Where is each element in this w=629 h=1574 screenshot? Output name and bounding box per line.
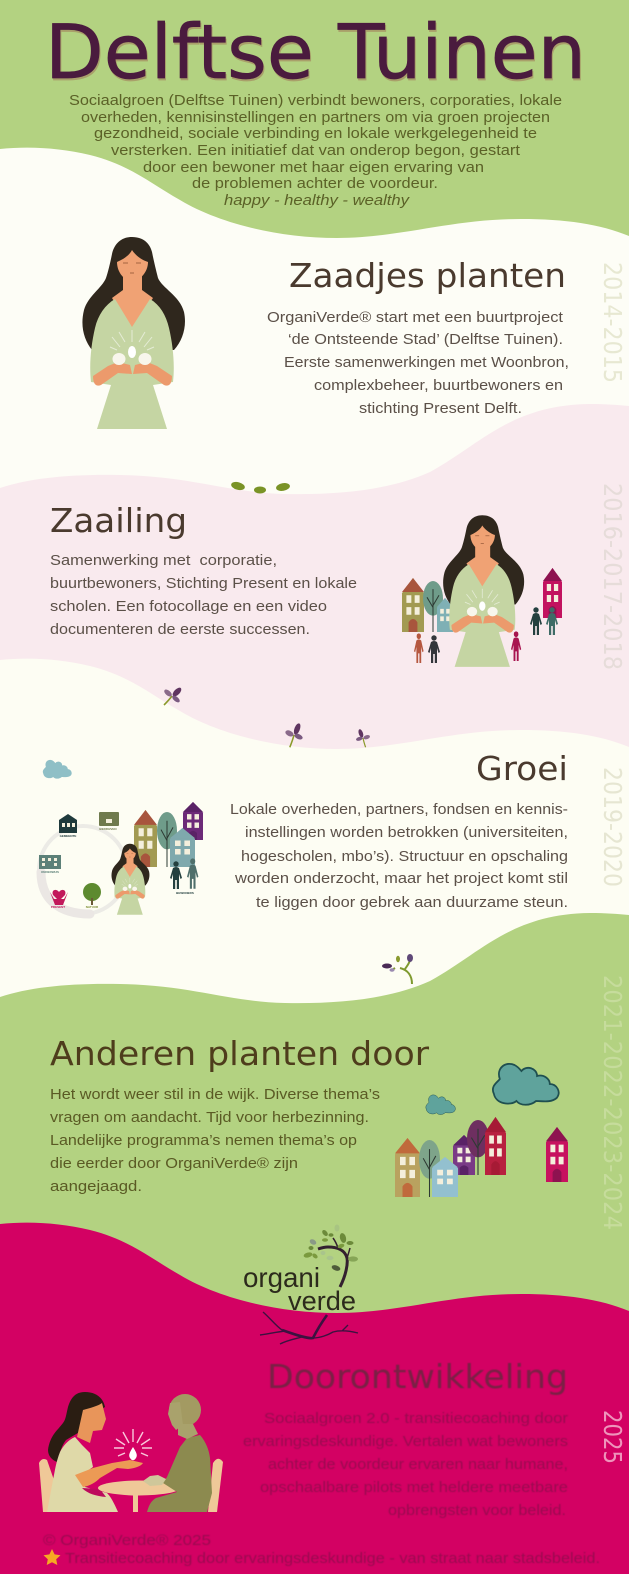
icon: sapling	[382, 954, 413, 984]
year label 2014-2015: 2014-2015	[598, 262, 627, 383]
heading: anderen planten door: Anderen planten door	[50, 1034, 429, 1073]
icon: star	[44, 1549, 60, 1565]
text: groei	[230, 802, 568, 911]
text: zaadjes planten: Eerste samenwerkingen met Woonbron,	[284, 355, 569, 371]
illustration: ecosystem ring with woman: NATUUR	[86, 905, 99, 909]
intro text: happy - healthy - wealthy	[224, 193, 411, 209]
year label 2016-2017-2018: 2016-2017-2018	[598, 483, 627, 670]
text: anderen planten door: Landelijke programma’s nemen thema’s op	[50, 1133, 357, 1149]
section: groei	[39, 749, 627, 915]
illustration: ecosystem ring with woman: PRESENT	[51, 905, 65, 909]
panel: zaadjes planten background	[0, 148, 629, 520]
section: anderen planten door	[50, 975, 627, 1230]
illustration: ecosystem ring with woman: ONDERWIJS	[41, 870, 59, 874]
illustration: ecosystem ring with woman: GEMEENTE	[60, 834, 76, 838]
text: doorontwikkeling: opschaalbare pilots met heldere meetbare	[260, 1480, 568, 1496]
illustration: two people at a table	[39, 1392, 223, 1512]
panel: zaailing background	[0, 404, 629, 760]
text: doorontwikkeling: ervaringsdeskundige. Vertalen wat bewoners	[243, 1434, 568, 1450]
year label 2021-2022-2023-2024: 2021-2022-2023-2024	[598, 975, 627, 1230]
text: groei: worden onderzocht, maar het project komt stil	[234, 871, 568, 887]
logo: organiverde: organi	[243, 1262, 320, 1293]
icon: sprout 2	[283, 721, 307, 748]
text: zaailing: scholen. Een fotocollage en een video	[50, 599, 327, 615]
text: anderen planten door: aangejaagd.	[50, 1179, 142, 1195]
text: zaailing: Samenwerking met corporatie,	[50, 553, 277, 569]
text: anderen planten door: vragen om aandacht. Tijd voor herbezinning.	[50, 1110, 369, 1126]
panel: groei background	[0, 659, 629, 1020]
text: groei: Lokale overheden, partners, fondsen en kennis-	[230, 802, 568, 818]
heading: zaadjes planten: Zaadjes planten	[289, 256, 566, 295]
heading: zaailing: Zaailing	[50, 501, 187, 540]
illustration: houses and trees	[395, 1117, 568, 1197]
illustration: woman holding seed	[82, 237, 185, 429]
intro text: door een bewoner met haar eigen ervaring van	[143, 160, 484, 176]
year label 2019-2020: 2019-2020	[598, 767, 627, 887]
title: Delftse Tuinen	[45, 8, 586, 96]
text: zaadjes planten: stichting Present Delft.	[359, 401, 522, 417]
text: zaailing	[50, 553, 357, 638]
text: doorontwikkeling: Sociaalgroen 2.0 - transitiecoaching door	[264, 1411, 568, 1427]
section: doorontwikkeling	[39, 1357, 627, 1567]
footer copyright: © OrganiVerde® 2025	[43, 1533, 211, 1549]
text: zaadjes planten	[267, 310, 569, 417]
intro text: gezondheid, sociale verbinding en lokale werkgelegenheid te	[94, 126, 537, 142]
text: anderen planten door: die eerder door OrganiVerde® zijn	[50, 1156, 298, 1172]
intro text: Sociaalgroen (Delftse Tuinen) verbindt bewoners, corporaties, lokale	[69, 93, 562, 109]
text: groei: te liggen door gebrek aan duurzame steun.	[256, 895, 568, 911]
logo: organiverde: verde	[288, 1286, 356, 1316]
intro text: versterken. Een initiatief dat van onderop begon, gestart	[111, 143, 520, 159]
illustration: woman with houses and people	[402, 515, 562, 667]
title: Delftse Tuinen	[46, 10, 587, 98]
text: zaailing: documenteren de eerste successen.	[50, 622, 310, 638]
icon: small cloud	[426, 1095, 455, 1115]
footer tagline: Transitiecoaching door ervaringsdeskundige - van straat naar stadsbeleid.	[65, 1551, 600, 1567]
logo: organiverde	[243, 1224, 358, 1344]
year label 2025: 2025	[598, 1410, 627, 1464]
intro text: de problemen achter de voordeur.	[192, 176, 438, 192]
text: zaadjes planten: ‘de Ontsteende Stad’ (Delftse Tuinen).	[288, 332, 563, 348]
icon: sprout 3	[353, 727, 372, 748]
text: anderen planten door: Het wordt weer stil in de wijk. Diverse thema’s	[50, 1087, 380, 1103]
panel: anderen planten door background	[0, 913, 629, 1330]
text: zaadjes planten: complexbeheer, buurtbewoners en	[314, 378, 563, 394]
icon: cloud small	[43, 760, 72, 779]
text: groei: hogescholen, mbo’s). Structuur en opschaling	[241, 849, 568, 865]
text: doorontwikkeling	[243, 1411, 568, 1519]
text: groei: instellingen worden betrokken (universiteiten,	[245, 825, 568, 841]
text: anderen planten door	[50, 1087, 380, 1195]
icon: large cloud	[493, 1064, 559, 1105]
illustration: ecosystem ring with woman: BEWONERS	[176, 891, 194, 895]
text: zaailing: buurtbewoners, Stichting Present en lokale	[50, 576, 357, 592]
heading: doorontwikkeling: Doorontwikkeling	[267, 1357, 568, 1396]
icon: sprout 1	[163, 686, 183, 705]
text: doorontwikkeling: achter de voordeur ervaren naar humane,	[268, 1457, 568, 1473]
heading: groei: Groei	[476, 749, 568, 788]
intro text: overheden, kennisinstellingen en partners om via groen projecten	[81, 110, 550, 126]
intro section	[45, 8, 587, 209]
panel: doorontwikkeling background	[0, 1223, 629, 1574]
illustration: ecosystem ring with woman	[39, 802, 203, 915]
intro text	[69, 93, 562, 209]
icon: seeds	[230, 481, 291, 494]
section: zaadjes planten	[82, 237, 627, 429]
illustration: ecosystem ring with woman: BEDRIJVEN	[99, 827, 117, 831]
text: zaadjes planten: OrganiVerde® start met een buurtproject	[267, 310, 563, 326]
text: doorontwikkeling: opbrengsten voor beleid.	[388, 1503, 566, 1519]
section: zaailing	[50, 483, 627, 670]
